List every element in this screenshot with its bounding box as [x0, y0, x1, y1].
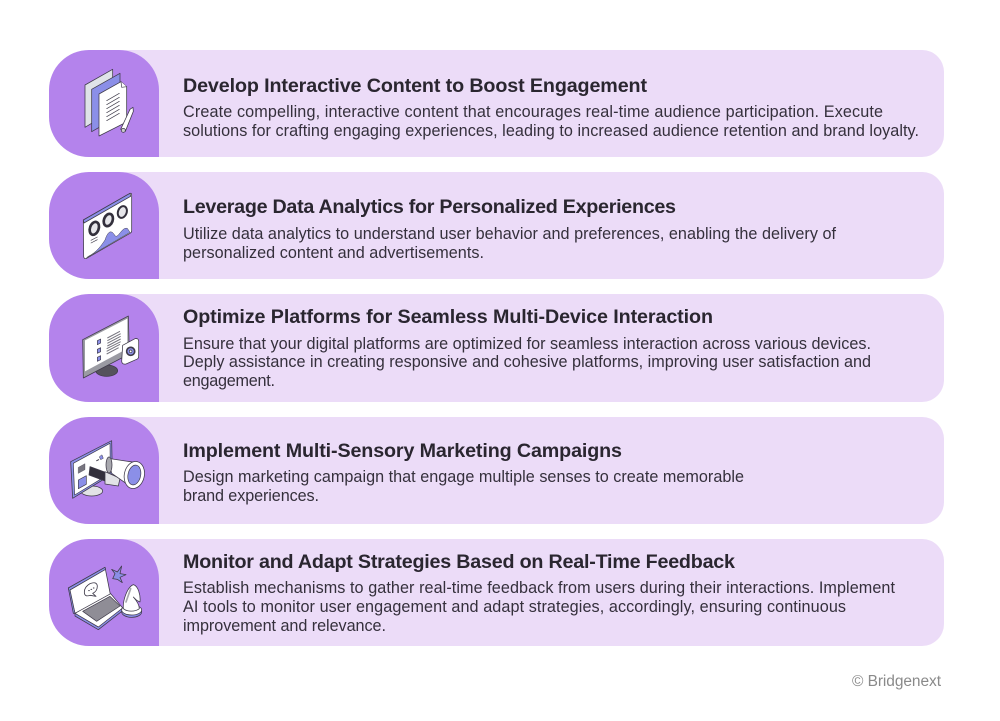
description — [183, 335, 871, 390]
panel: leverage data analytics — [49, 172, 944, 279]
description: Utilize data analytics to understand user behavior and preferences, enabling the delivery of — [183, 225, 836, 243]
panel: multi-sensory marketing — [49, 417, 944, 524]
description — [183, 468, 744, 505]
icon: monitor with megaphone — [71, 441, 147, 498]
description: Ensure that your digital platforms are optimized for seamless interaction across various devices. — [183, 335, 871, 353]
icon tile — [49, 50, 159, 157]
description: Deply assistance in creating responsive and cohesive platforms, improving user satisfaction and — [183, 353, 871, 371]
icon tile — [49, 294, 159, 402]
description: Design marketing campaign that engage multiple senses to create memorable — [183, 468, 744, 486]
heading: Leverage Data Analytics for Personalized Experiences — [183, 196, 676, 218]
panel: develop interactive content — [49, 50, 944, 157]
heading: Implement Multi-Sensory Marketing Campaigns — [183, 440, 622, 462]
heading: Monitor and Adapt Strategies Based on Real-Time Feedback — [183, 551, 735, 573]
icon: documents and pencil — [85, 69, 133, 136]
icon tile — [49, 417, 159, 524]
description — [183, 579, 896, 635]
panel: monitor and adapt — [49, 539, 944, 646]
heading: Optimize Platforms for Seamless Multi-Device Interaction — [183, 306, 713, 328]
icon: monitor with settings — [83, 316, 139, 378]
description: Establish mechanisms to gather real-time feedback from users during their interactions. Implement — [183, 579, 896, 597]
description: solutions for crafting engaging experiences, leading to increased audience retention and brand loyalty. — [183, 122, 919, 140]
card background — [90, 50, 944, 157]
description: personalized content and advertisements. — [183, 244, 484, 262]
description — [183, 103, 919, 140]
icon tile — [49, 539, 159, 646]
description: brand experiences. — [183, 487, 319, 505]
description: Create compelling, interactive content that encourages real-time audience participation. Execute — [183, 103, 883, 121]
description — [183, 225, 836, 262]
card background — [90, 294, 944, 402]
icon tile — [49, 172, 159, 279]
description: engagement. — [183, 372, 275, 390]
icon: laptop, star and chess knight — [68, 566, 142, 630]
copyright footer: © Bridgenext — [852, 673, 942, 690]
panel: optimize platforms — [49, 294, 944, 402]
heading: Develop Interactive Content to Boost Engagement — [183, 75, 647, 97]
card background — [90, 417, 944, 524]
icon: analytics dashboard — [83, 193, 132, 259]
description: AI tools to monitor user engagement and adapt strategies, accordingly, ensuring continuous — [183, 598, 846, 616]
card background — [90, 539, 944, 646]
description: improvement and relevance. — [183, 617, 386, 635]
card background — [90, 172, 944, 279]
